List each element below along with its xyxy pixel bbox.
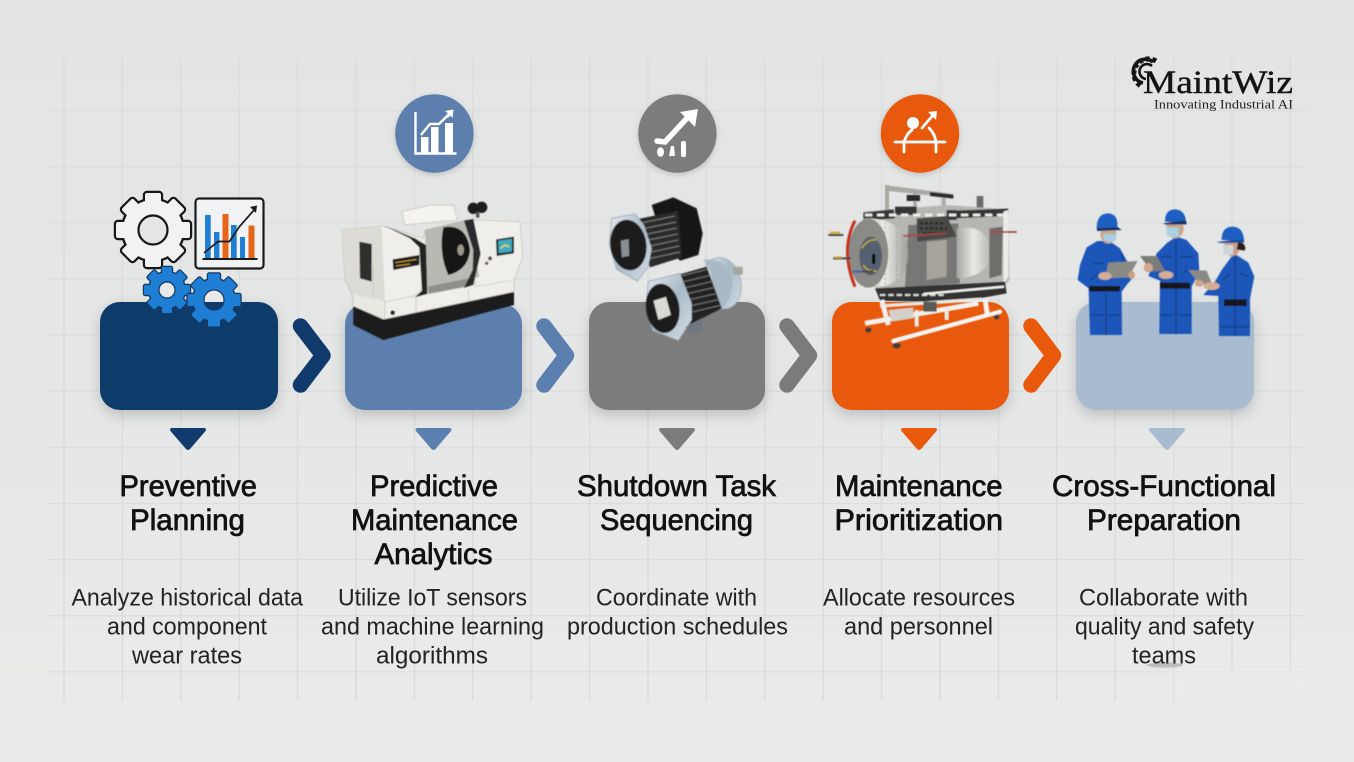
worker left — [1078, 213, 1138, 335]
card background — [589, 302, 765, 410]
arrow: chevron 3 — [787, 326, 810, 385]
heading: Maintenance Prioritization — [834, 470, 1003, 537]
heading: Cross-Functional Preparation: Cross-Functional — [1052, 470, 1276, 503]
logo wordmark: MaintWiz — [1143, 65, 1293, 101]
text: step 4 description — [823, 584, 1015, 640]
heading: Predictive Maintenance Analytics: Maintenance — [351, 504, 518, 537]
illustration: electric motors — [607, 197, 746, 341]
marker: triangle 3 — [659, 428, 695, 450]
panel: card 2 Predictive Maintenance Analytics — [342, 202, 523, 410]
panel: card 3 Shutdown Task Sequencing — [589, 197, 765, 410]
text: step 1 description: Analyze historical data — [72, 584, 304, 612]
arrow: chevron 2 — [544, 326, 566, 385]
heading: Shutdown Task Sequencing: Shutdown Task — [577, 470, 776, 503]
marker: triangle 5 — [1149, 428, 1185, 450]
icon: small blue gear — [144, 267, 190, 313]
marker: triangle 4 — [901, 428, 937, 450]
icon: analytics circle — [395, 94, 474, 173]
marker: triangle 2 — [416, 428, 452, 450]
heading: Maintenance Prioritization: Maintenance — [835, 470, 1002, 503]
text: step 1 description: wear rates — [131, 642, 242, 670]
text: step 3 description — [567, 584, 788, 640]
heading: Preventive Planning — [120, 470, 257, 537]
text: step 3 description: Coordinate with — [596, 584, 757, 612]
text: step 3 description: production schedules — [567, 614, 788, 640]
card background — [832, 302, 1009, 410]
text: step 5 description — [1075, 584, 1254, 670]
text: step 2 description — [321, 584, 544, 670]
icon: large blue gear — [188, 274, 240, 326]
text: step 1 description: and component — [107, 614, 267, 640]
illustration: three workers — [1078, 209, 1254, 336]
panel: card 5 Cross-Functional Preparation — [1076, 209, 1254, 410]
text: step 2 description: Utilize IoT sensors — [338, 584, 527, 612]
illustration: CNC machine — [342, 202, 523, 340]
icon: sequencing circle — [638, 94, 717, 173]
card background — [100, 302, 278, 410]
arrow: chevron 1 — [300, 326, 323, 385]
text: step 1 description — [72, 584, 304, 670]
card background — [345, 304, 522, 410]
logo: MaintWiz — [1133, 59, 1293, 112]
heading: Maintenance Prioritization: Prioritization — [834, 504, 1003, 537]
heading: Cross-Functional Preparation — [1052, 470, 1276, 537]
worker middle — [1140, 209, 1199, 334]
icon: prioritization circle — [881, 94, 959, 173]
icon: logo gear — [1133, 59, 1156, 86]
heading: Shutdown Task Sequencing — [577, 470, 776, 537]
heading: Cross-Functional Preparation: Preparation — [1087, 504, 1241, 537]
illustration: turbine assembly — [828, 185, 1017, 348]
card background — [1076, 302, 1254, 410]
logo tagline: Innovating Industrial AI — [1154, 98, 1293, 112]
text: step 4 description: and personnel — [844, 614, 993, 640]
arrow: chevron 4 — [1031, 326, 1054, 385]
text: step 2 description: and machine learning — [321, 614, 544, 640]
panel: card 1 Preventive Planning — [100, 193, 278, 410]
worker right — [1188, 227, 1254, 336]
heading: Shutdown Task Sequencing: Sequencing — [600, 504, 753, 537]
text: step 5 description: quality and safety — [1075, 614, 1254, 640]
heading: Predictive Maintenance Analytics: Predictive — [370, 470, 498, 503]
heading: Predictive Maintenance Analytics — [351, 470, 518, 571]
marker: triangle 1 — [170, 428, 206, 450]
heading: Preventive Planning: Preventive — [120, 470, 257, 503]
icon: chart box — [196, 198, 264, 268]
text: step 4 description: Allocate resources — [823, 584, 1015, 612]
text: step 2 description: algorithms — [376, 642, 488, 670]
heading: Predictive Maintenance Analytics: Analytics — [374, 538, 492, 571]
panel: card 4 Maintenance Prioritization — [828, 185, 1017, 410]
text: step 5 description: Collaborate with — [1079, 584, 1248, 612]
icon: white gear — [116, 193, 190, 267]
text: step 5 description: teams — [1132, 642, 1196, 670]
heading: Preventive Planning: Planning — [130, 504, 245, 537]
